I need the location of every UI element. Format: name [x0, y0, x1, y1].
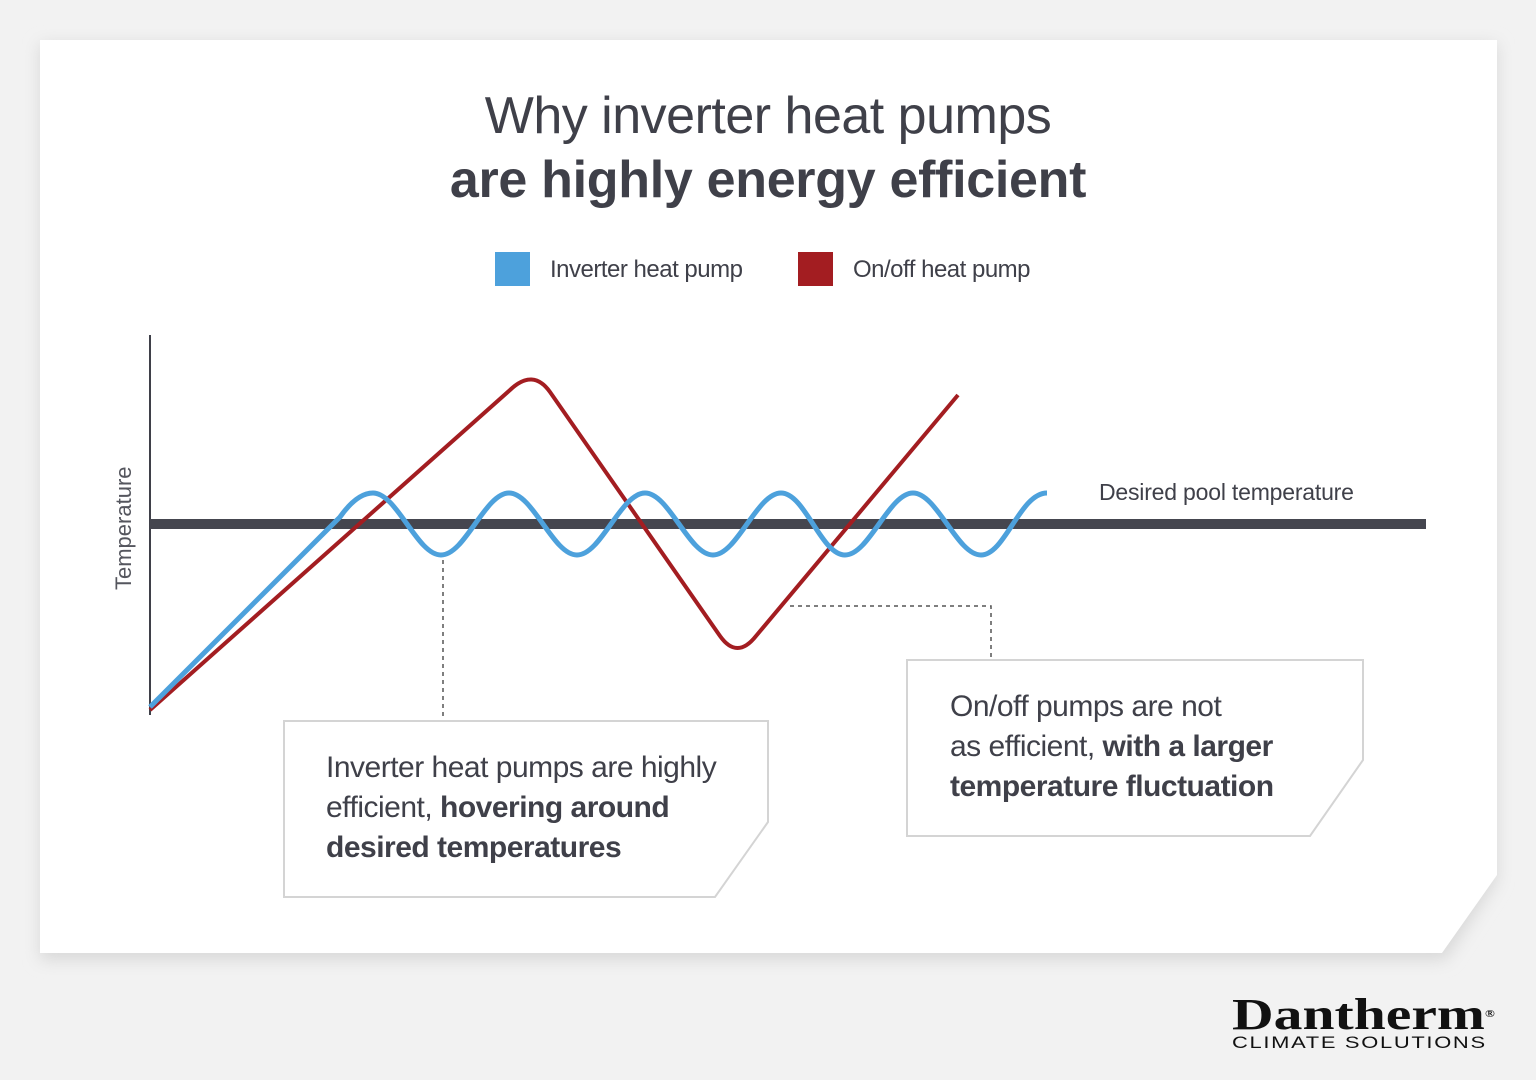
dashed leader 1	[442, 560, 444, 720]
legend: on/off	[798, 252, 1030, 286]
title	[450, 87, 1086, 209]
callout text 1: desired temperatures	[326, 831, 621, 864]
y axis label: Temperature	[111, 466, 136, 590]
legend: inverter: Inverter heat pump	[550, 256, 742, 283]
legend	[495, 252, 1030, 286]
logo: CLIMATE SOLUTIONS	[1232, 1033, 1487, 1052]
legend: on/off: On/off heat pump	[853, 256, 1030, 283]
on/off curve	[150, 379, 958, 710]
callout box 2	[907, 660, 1363, 836]
callout text 2: as efficient, with a larger	[950, 730, 1273, 763]
title: are highly energy efficient	[450, 151, 1086, 209]
desired temperature line	[150, 519, 1426, 529]
inverter curve	[150, 493, 1047, 707]
logo: Dantherm®	[1232, 990, 1495, 1039]
callout text 1: efficient, hovering around	[326, 791, 669, 824]
y axis	[149, 335, 151, 715]
legend: inverter	[495, 252, 742, 286]
title: Why inverter heat pumps	[485, 87, 1051, 145]
callout text 2: On/off pumps are not	[950, 690, 1221, 723]
callout box 1	[284, 721, 768, 897]
dashed leader 2	[790, 606, 991, 660]
callout text 2	[950, 690, 1274, 803]
callout text 2: temperature fluctuation	[950, 770, 1274, 803]
callout text 1	[326, 751, 717, 864]
desired label: Desired pool temperature	[1099, 479, 1354, 505]
callout text 1: Inverter heat pumps are highly	[326, 751, 716, 784]
